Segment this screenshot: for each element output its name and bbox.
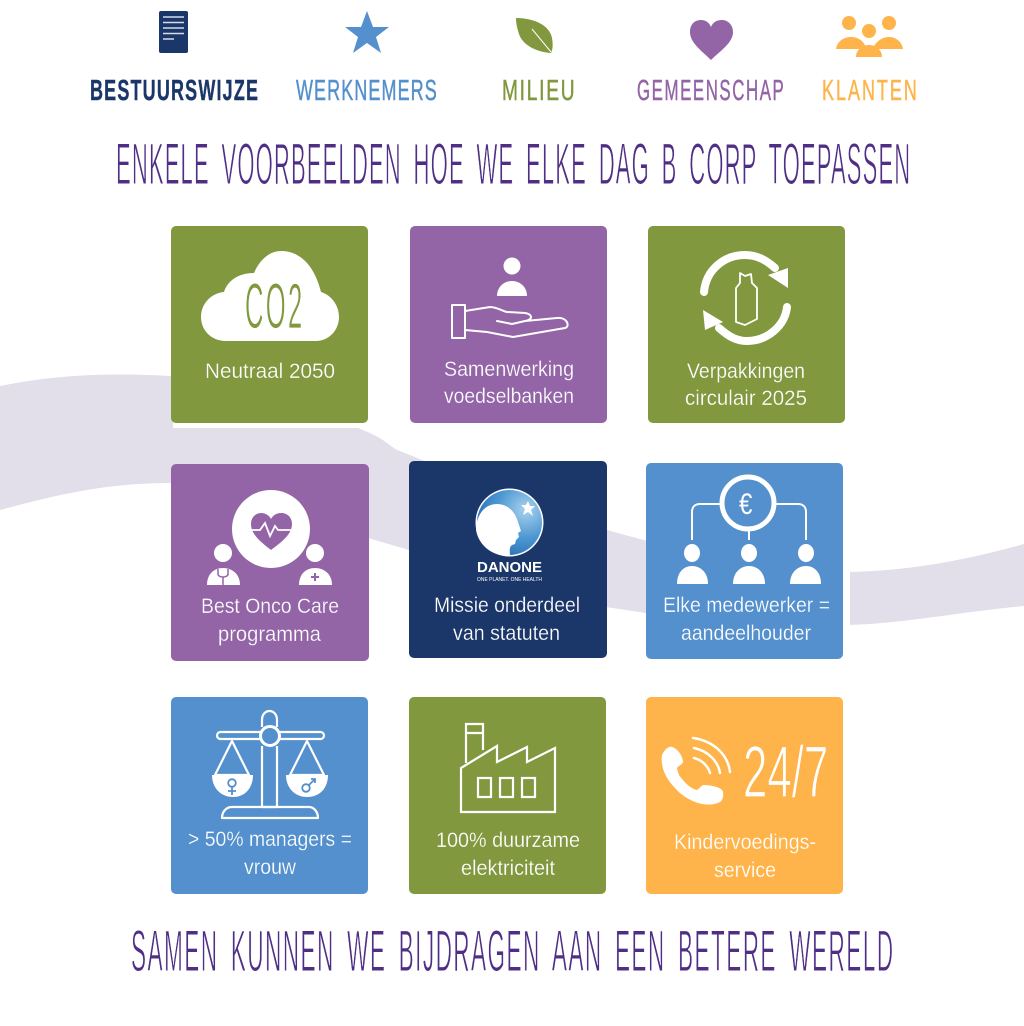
icon: heart	[690, 20, 733, 60]
panel: missie: van statuten	[453, 622, 560, 645]
panel: CO2 neutraal	[171, 226, 368, 423]
label: > 50% managers =	[188, 828, 352, 851]
panel: managers	[171, 697, 368, 894]
panel: aandeelhouder	[646, 463, 843, 659]
category: bestuurswijze	[90, 11, 258, 107]
label: klanten: KLANTEN	[822, 75, 917, 107]
icon: CO2 cloud: CO2	[245, 272, 302, 342]
category: werknemers	[296, 11, 437, 107]
icon: star	[345, 11, 389, 53]
label: Neutraal 2050	[205, 360, 335, 383]
label: Missie onderdeel	[434, 594, 580, 617]
panel: managers: vrouw	[244, 856, 297, 879]
icon: euro and shareholders: €	[739, 486, 752, 521]
panel: voedselbanken	[410, 226, 607, 423]
panel: kindervoedingsservice: service	[714, 859, 776, 882]
label: Kindervoedings-	[674, 831, 816, 854]
panel: voedselbanken: voedselbanken	[444, 385, 574, 408]
category: gemeenschap	[637, 20, 784, 107]
label: bestuurswijze: BESTUURSWIJZE	[90, 75, 258, 107]
icon: Danone logo: DANONE	[477, 559, 542, 576]
icon: phone 24/7: 24/7	[743, 732, 828, 813]
panel: elektriciteit	[409, 697, 606, 894]
icon: people	[836, 16, 903, 57]
panel: onco care	[171, 464, 369, 661]
icon: CO2 cloud	[201, 251, 339, 342]
icon: factory	[461, 724, 555, 812]
category: klanten	[822, 16, 917, 107]
label: Elke medewerker =	[663, 594, 830, 617]
category: milieu	[502, 18, 575, 107]
icon: phone 24/7	[662, 732, 828, 813]
panel: aandeelhouder: aandeelhouder	[681, 622, 811, 645]
background wave	[0, 374, 1024, 627]
icon: euro and shareholders	[677, 477, 821, 584]
closing line: SAMEN KUNNEN WE BIJDRAGEN AAN EEN BETERE WERELD	[131, 920, 893, 984]
label: Best Onco Care	[201, 595, 339, 618]
icon: document	[159, 11, 188, 53]
panel: elektriciteit: elektriciteit	[461, 857, 555, 880]
title: ENKELE VOORBEELDEN HOE WE ELKE DAG B CORP TOEPASSEN	[116, 132, 910, 197]
icon: heart with care givers	[207, 490, 332, 585]
panel: missie	[409, 461, 607, 658]
icon: scales	[212, 711, 328, 818]
icon: Danone logo	[476, 488, 544, 583]
label: werknemers: WERKNEMERS	[296, 75, 437, 107]
icon: Danone logo: ONE PLANET. ONE HEALTH	[477, 577, 542, 583]
label: gemeenschap: GEMEENSCHAP	[637, 76, 784, 107]
label: Verpakkingen	[687, 360, 805, 383]
panel: verpakkingen: circulair 2025	[685, 387, 807, 410]
icon: recycling bottle	[703, 255, 788, 341]
icon: leaf	[516, 18, 553, 53]
panel: verpakkingen	[648, 226, 845, 423]
label: milieu: MILIEU	[502, 75, 575, 107]
panel: onco care: programma	[218, 623, 321, 646]
icon: hand with person	[452, 258, 568, 338]
panel: kindervoedingsservice	[646, 697, 843, 894]
label: Samenwerking	[444, 358, 574, 381]
label: 100% duurzame	[436, 829, 580, 852]
